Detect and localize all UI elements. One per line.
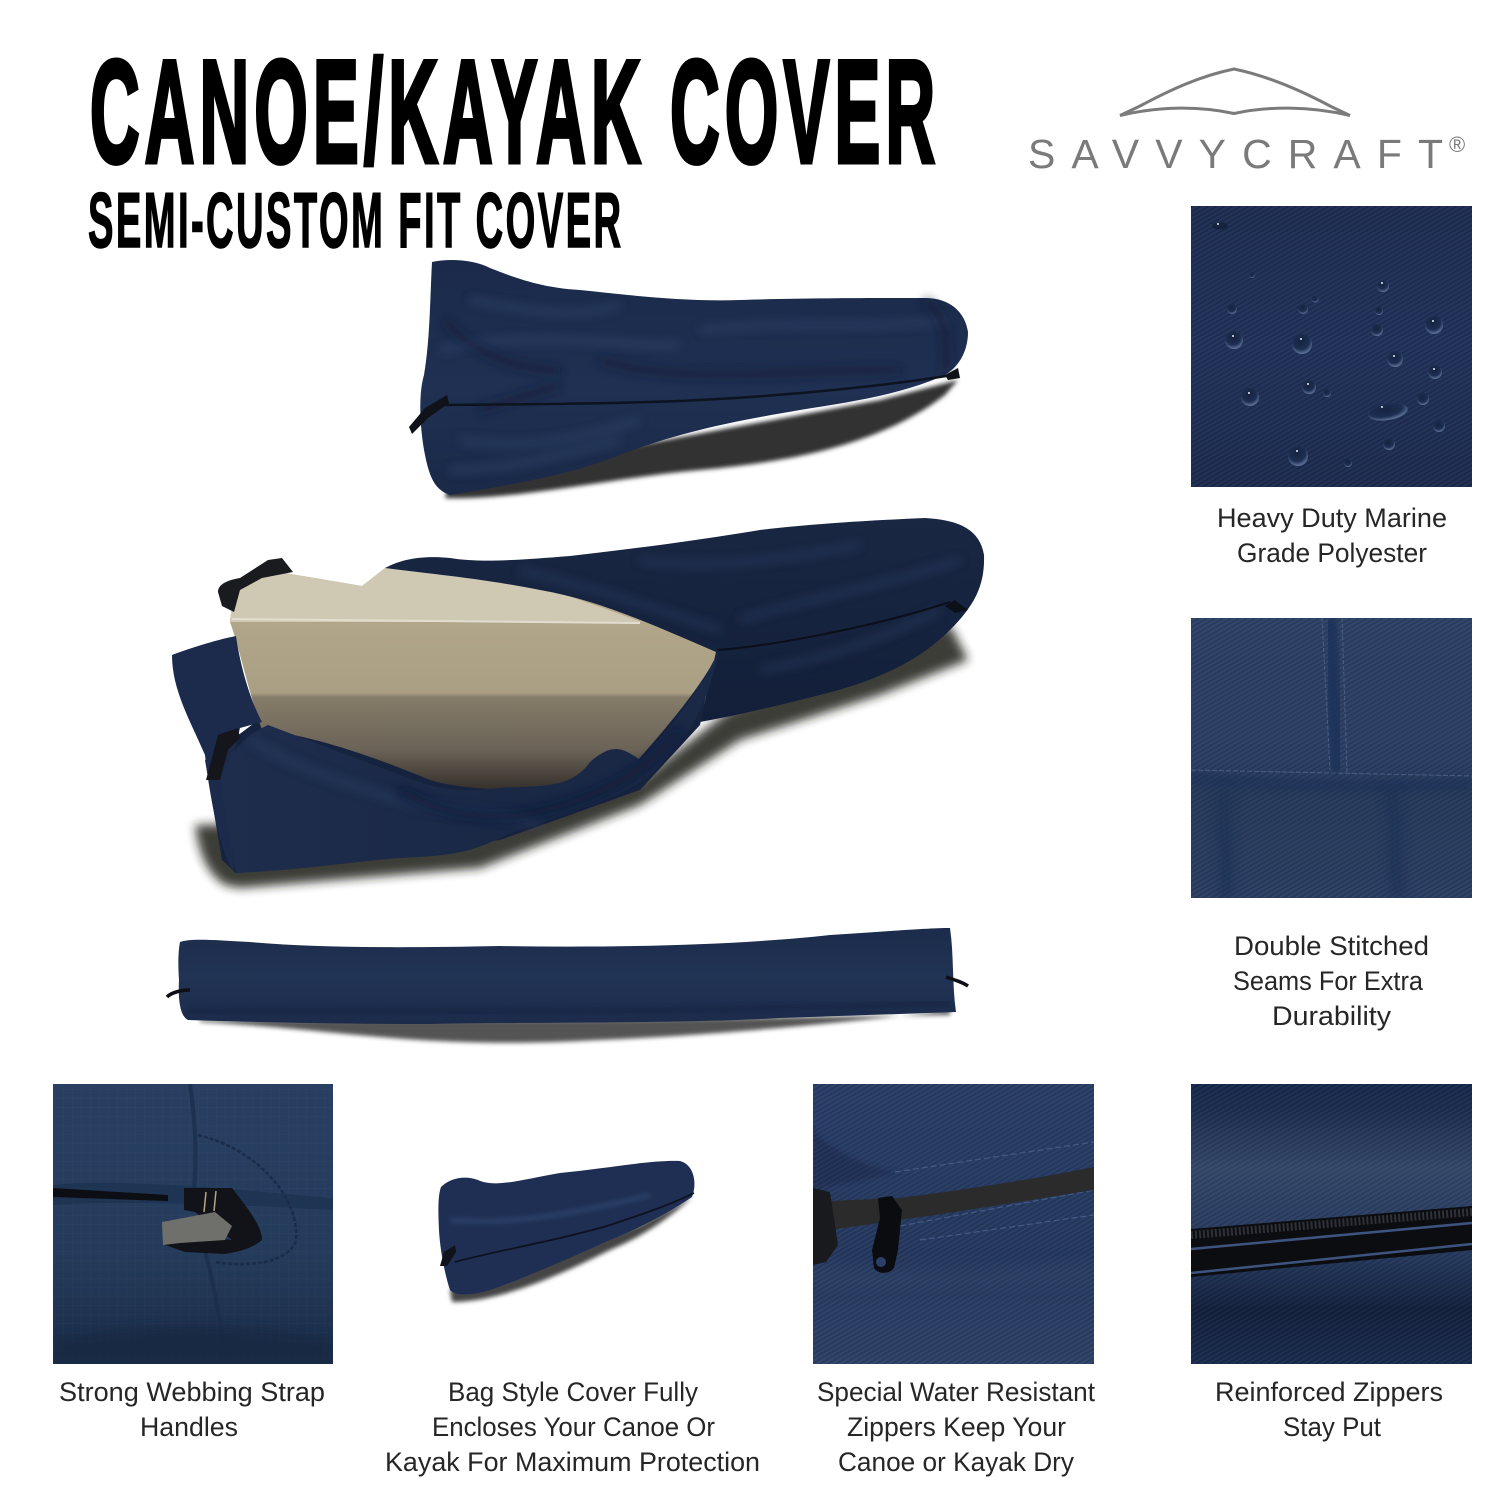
caption: reinforced zippers [1215,1377,1443,1442]
zipper tape [830,1167,1094,1230]
hull [230,568,720,795]
caption: handles: Handles [140,1412,238,1442]
caption: polyester [1217,503,1447,568]
strap [206,728,240,780]
caption: handles [59,1377,325,1442]
cover, stern half [385,518,984,722]
caption: seams: Double Stitched [1234,931,1429,961]
zipper line [718,602,950,650]
zipper tape [53,1188,168,1201]
front flap [222,652,718,873]
caption: zippers dry: Zippers Keep Your [847,1412,1066,1442]
wrinkles [440,300,950,470]
logo: Savvycraft: SAVVYCRAFT [1028,131,1443,177]
caption: seams [1233,931,1429,1031]
caption: zippers dry: Special Water Resistant [817,1377,1095,1407]
caption: bag style: Kayak For Maximum Protection [385,1447,760,1477]
backing fill [205,650,715,873]
panel: marine grade polyester swatch with water droplets [1191,206,1472,487]
caption: bag style: Encloses Your Canoe Or [432,1412,715,1442]
bow handle [218,558,293,612]
caption: zippers dry: Canoe or Kayak Dry [838,1447,1074,1477]
caption: polyester: Grade Polyester [1237,538,1427,568]
caption: handles: Strong Webbing Strap [59,1377,325,1407]
zipper band [1191,1206,1472,1277]
title: CANOE/KAYAK COVER [90,31,935,194]
caption: reinforced zippers: Reinforced Zippers [1215,1377,1443,1407]
strap [165,1188,262,1254]
caption: bag style: Bag Style Cover Fully [448,1377,698,1407]
bag left [172,636,262,873]
zipper pull [872,1196,902,1273]
product image: cover unzipped showing hull [172,518,984,888]
panel: reinforced zipper swatch [1191,1084,1472,1364]
small product image: bag style cover [438,1161,694,1302]
zipper [440,374,958,405]
caption: seams: Durability [1272,1001,1392,1031]
subtitle: SEMI-CUSTOM FIT COVER [88,177,621,265]
caption: bag style [385,1377,760,1477]
panel: water resistant zipper swatch [813,1084,1094,1364]
caption: reinforced zippers: Stay Put [1283,1412,1381,1442]
product image: zipped cover, top [409,260,968,498]
product image: fully closed cover, side view [167,928,968,1043]
caption: zippers dry [817,1377,1095,1477]
water droplets [1212,222,1445,467]
seams [1192,774,1470,791]
logo: Savvycraft: ® [1449,132,1465,157]
caption: seams: Seams For Extra [1233,966,1424,996]
panel: double stitched seams swatch [1191,618,1472,898]
caption: polyester: Heavy Duty Marine [1217,503,1447,533]
logo: Savvycraft [1028,69,1465,177]
panel: webbing strap handle swatch [53,1084,333,1364]
